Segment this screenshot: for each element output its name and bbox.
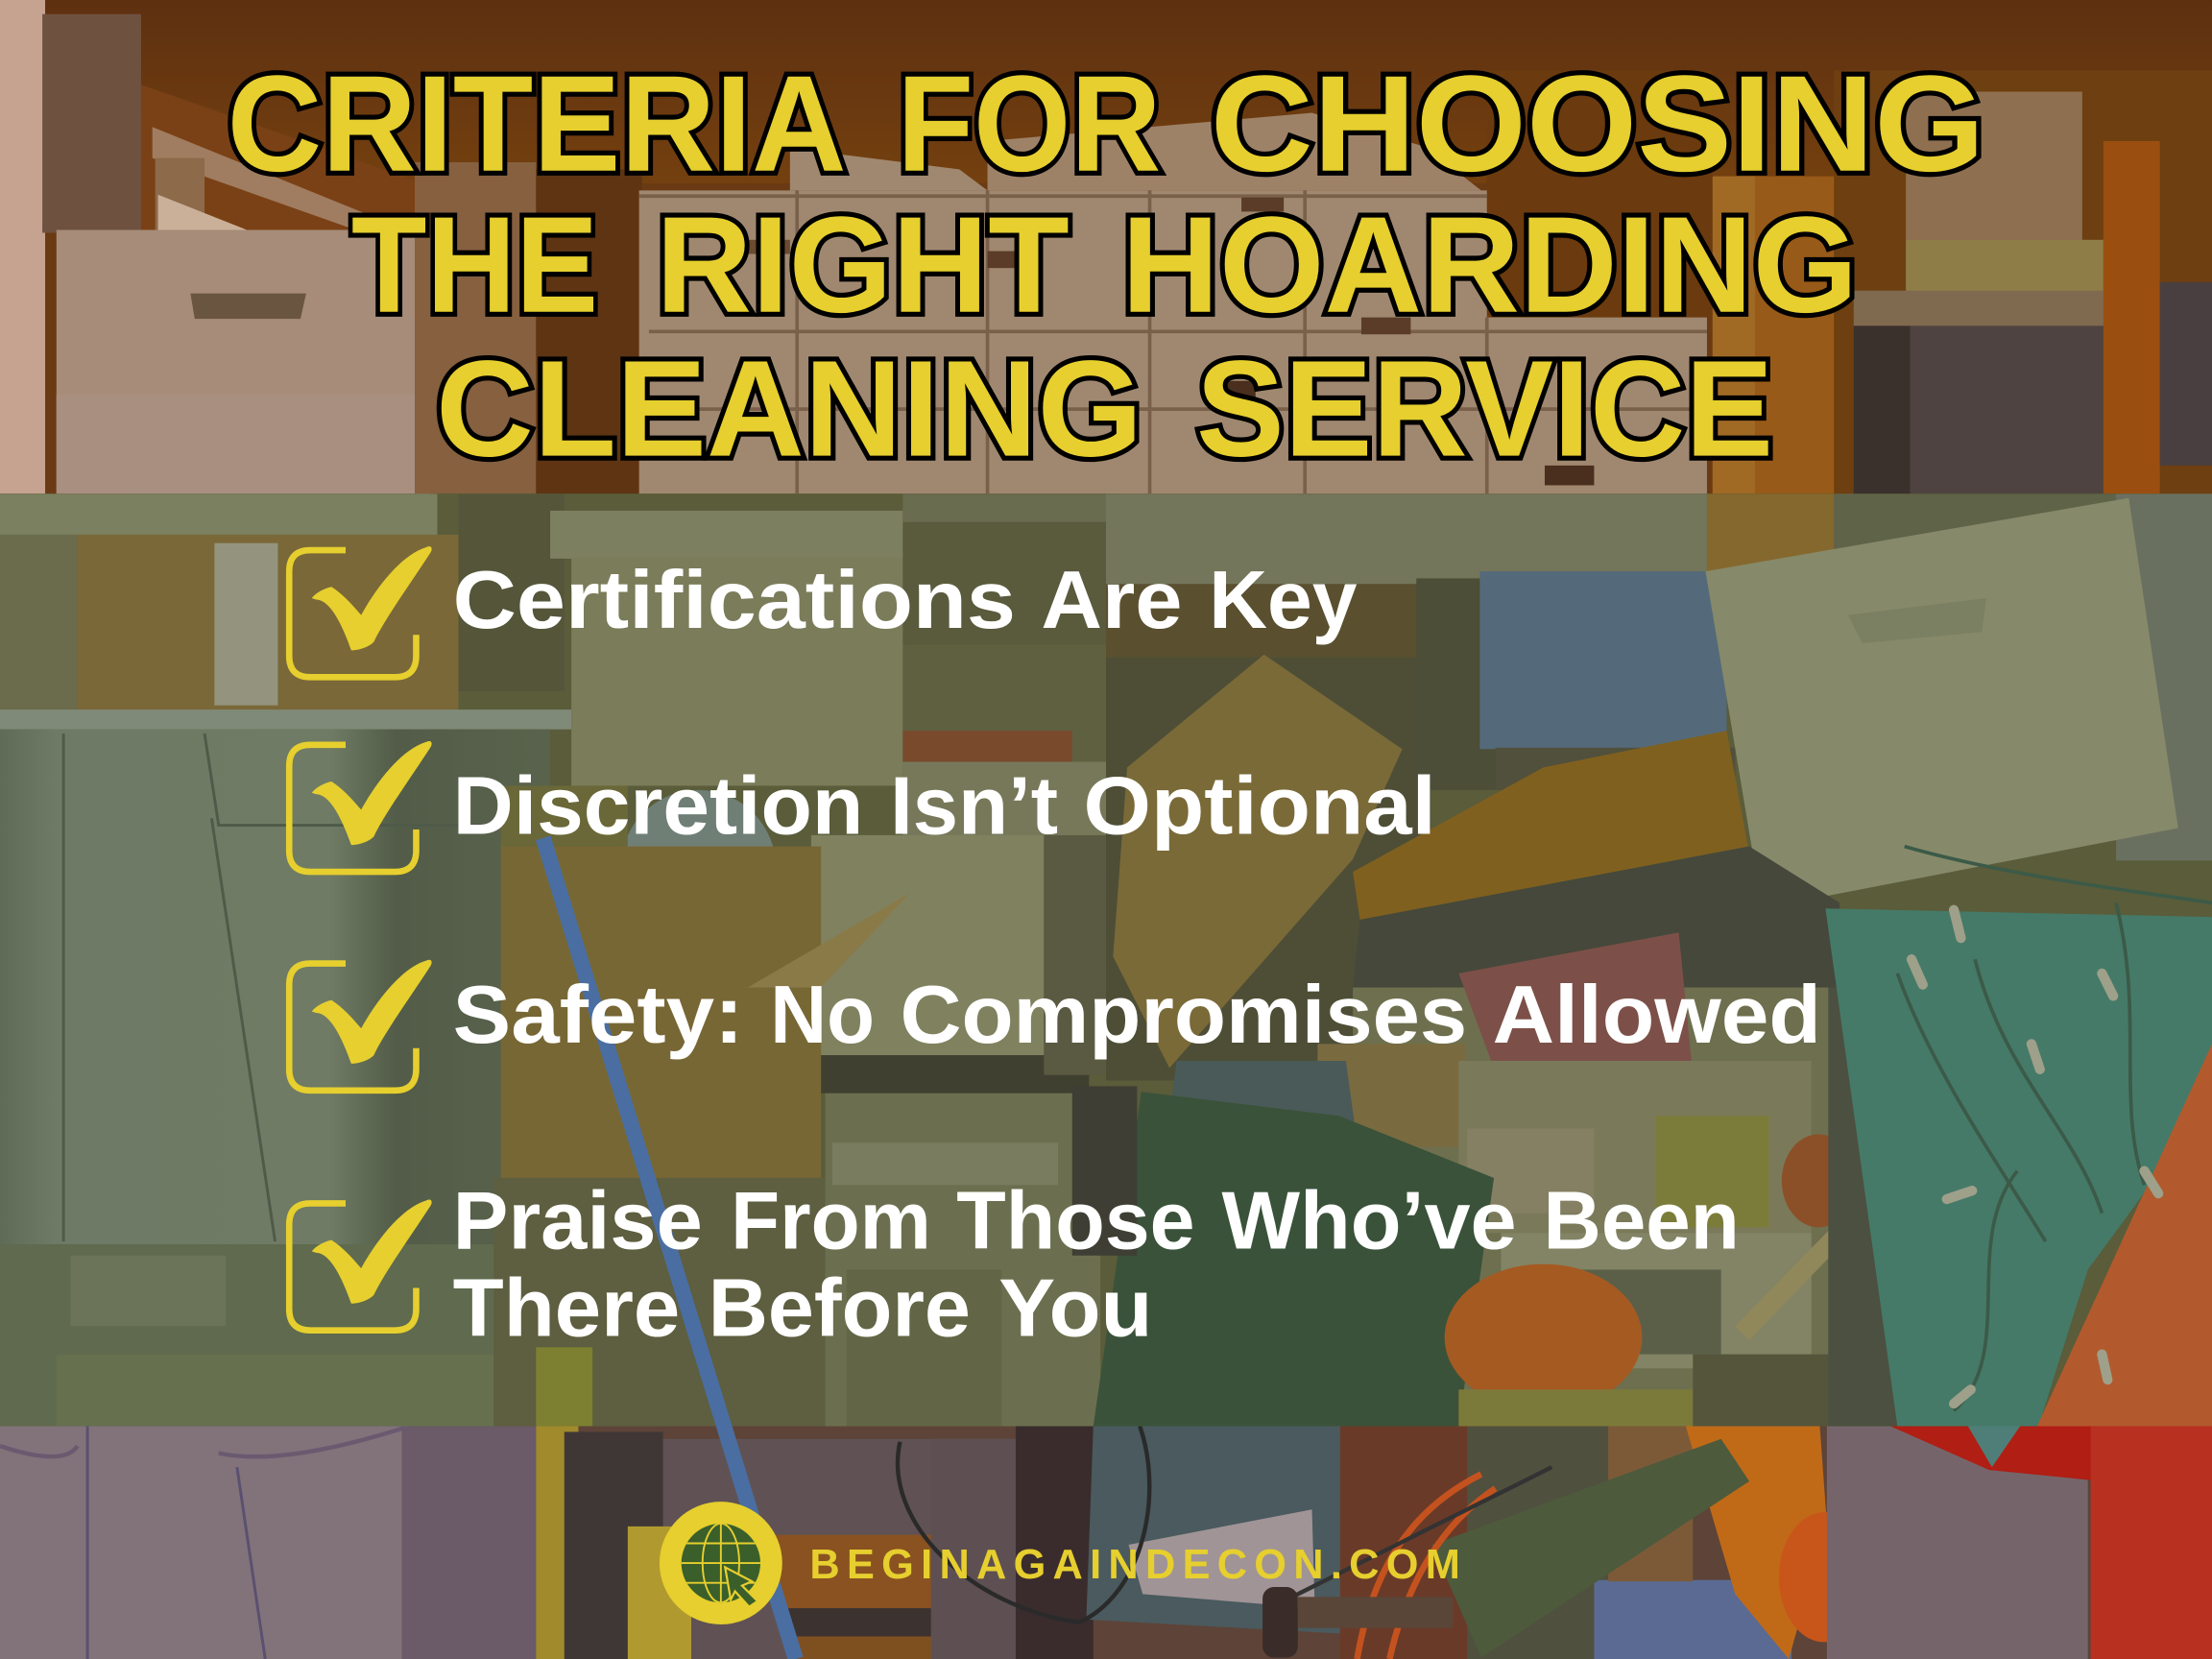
middle band scene <box>0 493 2212 1427</box>
criteria checklist <box>289 546 1821 1355</box>
item 2: discretion: Discretion <box>453 760 863 852</box>
item 4: praise: From <box>731 1175 931 1266</box>
icon: globe with cursor <box>660 1502 782 1624</box>
item 1: certifications <box>289 546 1358 677</box>
item 4: praise: Been <box>1544 1175 1740 1266</box>
item 2: discretion: Isn’t <box>890 760 1058 852</box>
top band scene <box>0 0 2212 493</box>
item 4: praise: Who’ve <box>1221 1175 1517 1266</box>
title: CLEANING <box>436 333 1142 486</box>
item 3: safety: No <box>770 970 875 1061</box>
item 4: praise: You <box>998 1263 1152 1355</box>
item 1: certifications: Certifications <box>453 555 1016 646</box>
title: FOR <box>898 48 1161 201</box>
title: HOARDING <box>1121 189 1858 342</box>
title: SERVICE <box>1196 333 1773 486</box>
item 2: discretion: Optional <box>1083 760 1436 852</box>
item 4: praise: Praise <box>453 1175 703 1266</box>
item 3: safety: Safety: <box>453 970 743 1061</box>
item 4: praise: Those <box>956 1175 1195 1266</box>
item 3: safety: Compromises <box>900 970 1467 1061</box>
item 4: praise: Before <box>709 1263 971 1355</box>
title: CHOOSING <box>1211 48 1984 201</box>
item 3: safety <box>289 960 1821 1091</box>
blue broom pole <box>543 838 796 1659</box>
item 2: discretion <box>289 741 1436 872</box>
title: CRITERIA <box>228 48 847 201</box>
item 4: praise: There <box>453 1263 680 1355</box>
item 1: certifications: Key <box>1209 555 1358 646</box>
item 3: safety: Allowed <box>1493 970 1821 1061</box>
title <box>228 48 1984 486</box>
title: RIGHT <box>656 189 1070 342</box>
website address: BEGINAGAINDECON.COM <box>809 1542 1460 1588</box>
bottom band scene <box>0 1427 2212 1659</box>
item 4: praise <box>289 1175 1740 1355</box>
item 1: certifications: Are <box>1041 555 1182 646</box>
title: THE <box>351 189 598 342</box>
